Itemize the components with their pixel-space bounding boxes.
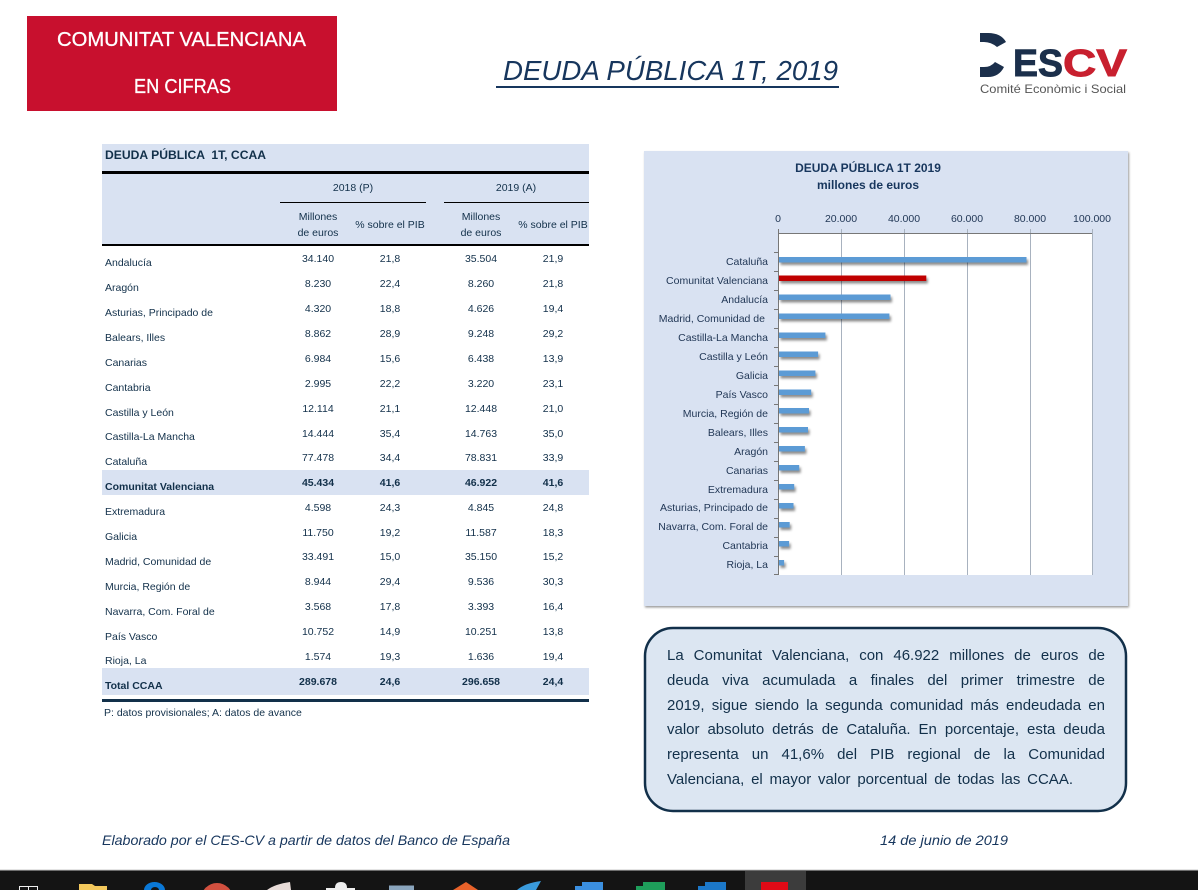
chart title: DEUDA PÚBLICA 1T 2019 [795,160,941,175]
logo: CES CV [980,33,1128,96]
table header: de euros [298,227,338,239]
table rows: 8.944 [305,576,331,588]
axis labels: 100.000 [1073,213,1111,225]
callout: summary text: representa un 41,6% del PIB regional de la Comunidad [667,746,1105,763]
category labels: Madrid, Comunidad de [659,313,765,325]
table rows: 296.658 [462,676,500,688]
table header: % sobre el PIB [518,219,588,231]
table rows: 8.260 [468,278,494,290]
header badge: Comunitat Valenciana en cifras: EN CIFRAS [134,76,231,98]
table rows: 8.230 [305,278,331,290]
category labels: Murcia, Región de [683,408,768,420]
table header: Millones [462,211,500,223]
table rows: 6.984 [305,353,331,365]
axis labels: 80.000 [1014,213,1046,225]
table header: de euros [461,227,501,239]
panel: debt table [102,144,589,719]
table rows: 18,3 [543,527,563,539]
table rows: 11.587 [465,527,497,539]
table header [102,144,589,246]
table rows: 19,4 [543,303,563,315]
header badge: Comunitat Valenciana en cifras: COMUNITAT VALENCIANA [57,29,307,51]
table rows: 6.438 [468,353,494,365]
table rows: 35.504 [465,253,497,265]
table rows: 3.568 [305,601,331,613]
table rows: 35,4 [380,428,400,440]
table rows: Asturias, Principado de [105,307,213,319]
table rows: Canarias [105,357,147,369]
table rows: Rioja, La [105,655,147,667]
table rows: 41,6 [380,477,400,489]
table rows: 8.862 [305,328,331,340]
table rows: 3.220 [468,378,494,390]
table rows: 17,8 [380,601,400,613]
table rows: Navarra, Com. Foral de [105,606,215,618]
callout: summary text: deuda viva acumulada a finales del primer trimestre de [667,672,1105,689]
title: DEUDA PÚBLICA 1T, 2019 [503,55,838,86]
table rows: 15,6 [380,353,400,365]
table rows: 28,9 [380,328,400,340]
table rows: 2.995 [305,378,331,390]
table rows: 34,4 [380,452,400,464]
category labels: Rioja, La [727,559,768,571]
logo: CES CV: ES [1013,43,1063,85]
category labels: Balears, Illes [708,427,768,439]
chart title: millones de euros [817,178,919,192]
table rows: Balears, Illes [105,332,165,344]
header badge: Comunitat Valenciana en cifras [27,16,337,111]
category labels: Comunitat Valenciana [666,275,768,287]
table rows: 4.845 [468,502,494,514]
table rows: 12.448 [465,403,497,415]
axis labels [775,213,1111,225]
plot area [778,233,1092,575]
table rows: 46.922 [465,477,497,489]
logo: CES CV: CV [1063,43,1128,85]
table rows: 14.763 [465,428,497,440]
table rows: 33,9 [543,452,563,464]
axis labels: 0 [775,213,781,225]
table rows: Madrid, Comunidad de [105,556,211,568]
table rows: 24,3 [380,502,400,514]
table rows: 19,2 [380,527,400,539]
logo: CES CV: Comité Econòmic i Social [980,82,1126,96]
table rows: 14.444 [302,428,334,440]
table rows: 78.831 [465,452,497,464]
table rows: Andalucía [105,257,152,269]
table rows: 24,6 [380,676,400,688]
table rows: 16,4 [543,601,563,613]
table header: 2018 (P) [333,182,373,194]
table rows: 3.393 [468,601,494,613]
category labels: Extremadura [708,484,768,496]
table header: % sobre el PIB [355,219,425,231]
table rows: Castilla y León [105,407,174,419]
table rows: 41,6 [543,477,563,489]
table rows: Castilla-La Mancha [105,431,195,443]
table rows: 45.434 [302,477,334,489]
table rows: 22,2 [380,378,400,390]
table rows: 13,8 [543,626,563,638]
category labels: Andalucía [721,294,768,306]
axis labels: 60.000 [951,213,983,225]
table rows [105,253,563,692]
table rows: 35,0 [543,428,563,440]
table rows: 4.598 [305,502,331,514]
table rows: 10.752 [302,626,334,638]
callout: summary text: Valenciana, el mayor valor porcentual de todas las CCAA. [667,771,1073,788]
table rows: 30,3 [543,576,563,588]
callout: summary text: La Comunitat Valenciana, con 46.922 millones de euros de [667,647,1105,664]
category labels: Castilla y León [699,351,768,363]
category labels: Asturias, Principado de [660,502,768,514]
table rows: 15,2 [543,551,563,563]
footer: source: Elaborado por el CES-CV a partir de datos del Banco de España [102,832,510,848]
callout: summary text: 2019, sigue siendo la segunda comunidad más endeudada en [667,697,1105,714]
table rows: 21,0 [543,403,563,415]
table rows: Extremadura [105,506,165,518]
callout: summary text [645,628,1126,811]
table rows: País Vasco [105,631,157,643]
table rows: 21,9 [543,253,563,265]
table header: Millones [299,211,337,223]
table rows: 13,9 [543,353,563,365]
table header: 2019 (A) [496,182,536,194]
table header: DEUDA PÚBLICA 1T, CCAA [105,147,266,162]
table rows: 77.478 [302,452,334,464]
table rows: 10.251 [465,626,497,638]
category labels: Aragón [734,446,768,458]
table rows: Cantabria [105,382,151,394]
category labels: Canarias [726,465,768,477]
table rows: 22,4 [380,278,400,290]
table rows: Comunitat Valenciana [105,481,214,493]
category labels: Cantabria [722,540,768,552]
table rows: 33.491 [302,551,334,563]
table rows: Murcia, Región de [105,581,190,593]
category labels: Castilla-La Mancha [678,332,768,344]
table rows: 19,4 [543,651,563,663]
table rows: 19,3 [380,651,400,663]
table rows: 9.248 [468,328,494,340]
table rows: 289.678 [299,676,337,688]
bars [779,257,1026,566]
table rows: 15,0 [380,551,400,563]
table rows: 12.114 [302,403,334,415]
table rows: 21,1 [380,403,400,415]
axis labels: 40.000 [888,213,920,225]
table rows: 1.636 [468,651,494,663]
panel: bar chart [644,151,1128,606]
callout: summary text: valor absoluto detrás de Cataluña. En porcentaje, esta deuda [667,721,1105,738]
table rows: 29,4 [380,576,400,588]
taskbar strip [0,870,1198,890]
table rows: 34.140 [302,253,334,265]
total row band [102,668,589,695]
highlighted row band: Comunitat Valenciana [102,470,589,495]
table rows: 4.320 [305,303,331,315]
table rows: 9.536 [468,576,494,588]
table rows: Aragón [105,282,139,294]
footer: date: 14 de junio de 2019 [880,832,1008,848]
table rows: 24,8 [543,502,563,514]
table rows: 29,2 [543,328,563,340]
table footnote: P: datos provisionales; A: datos de avance [104,707,302,719]
table rows: Cataluña [105,456,147,468]
table rows: 18,8 [380,303,400,315]
axis labels: 20.000 [825,213,857,225]
table rows: Galicia [105,531,137,543]
table rows: Total CCAA [105,680,163,692]
table rows: 11.750 [302,527,334,539]
category labels: Navarra, Com. Foral de [658,521,768,533]
table rows: 35.150 [465,551,497,563]
table rows: 21,8 [543,278,563,290]
table rows: 1.574 [305,651,331,663]
category labels: País Vasco [716,389,768,401]
category labels: Cataluña [726,256,768,268]
category labels [658,256,768,571]
category labels: Galicia [736,370,768,382]
table rows: 4.626 [468,303,494,315]
table rows: 24,4 [543,676,563,688]
chart title [795,160,941,192]
table rows: 21,8 [380,253,400,265]
table rows: 14,9 [380,626,400,638]
table rows: 23,1 [543,378,563,390]
